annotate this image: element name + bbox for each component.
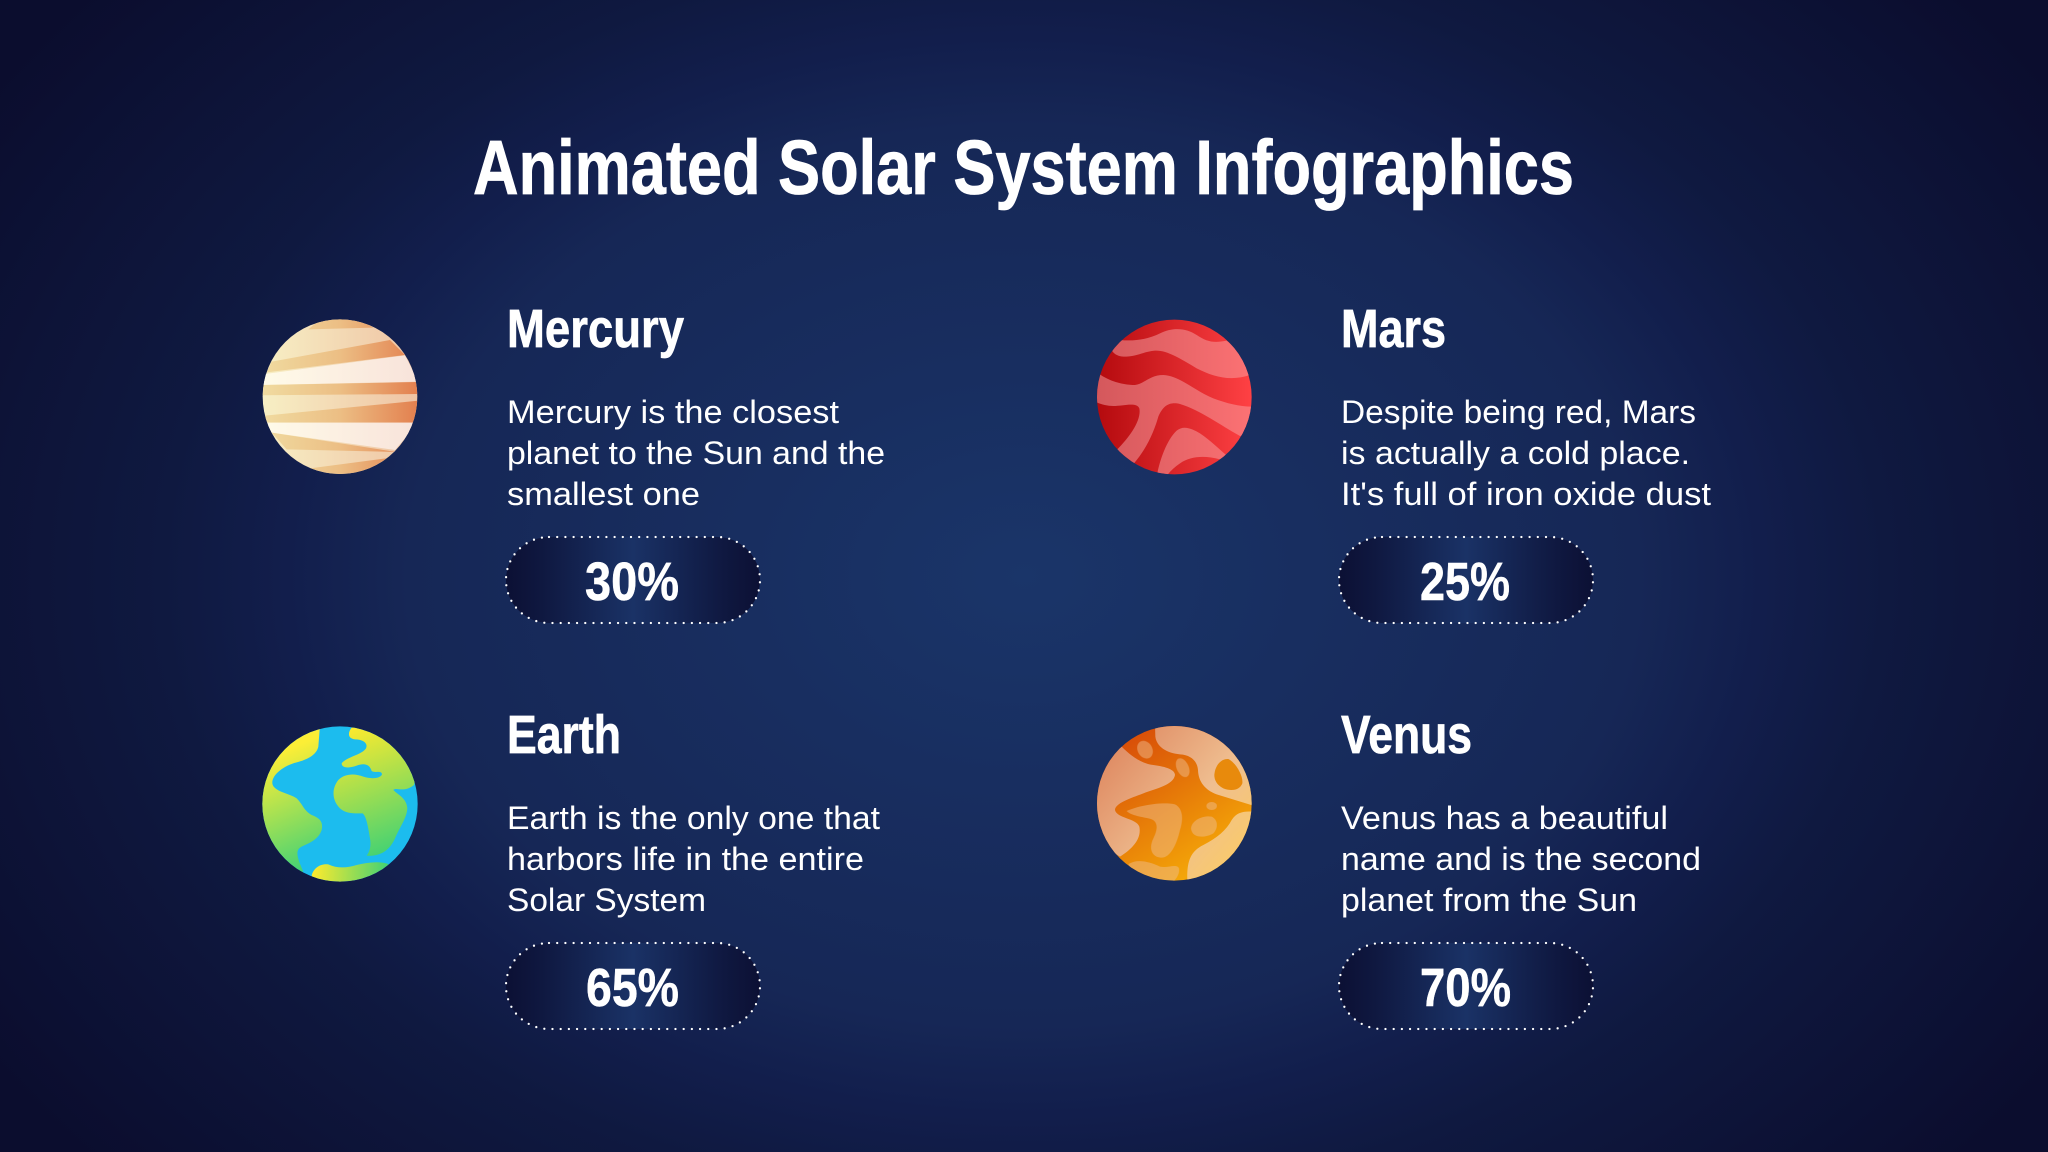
text: Mercury description: smallest one [507,476,700,512]
pill: 70% [1339,943,1593,1029]
text: Venus description: name and is the second [1341,841,1701,877]
pill: 70%: 70% [1420,958,1511,1018]
text: Mars description: Despite being red, Mars [1341,394,1696,430]
icon: Mars planet [1093,317,1257,480]
icon: Venus planet [1097,726,1252,881]
panel: Venus [1090,705,1701,1029]
text: Mars description [1341,394,1711,512]
text: Mars description: It's full of iron oxide dust [1341,476,1711,512]
text: Venus description [1341,800,1701,918]
text: Mercury description: Mercury is the closest [507,394,839,430]
icon: Earth planet [262,726,418,882]
text: Mercury description [507,394,885,512]
text: Venus description: Venus has a beautiful [1341,800,1668,836]
heading: Mercury: Mercury [507,299,684,359]
heading: Earth: Earth [507,705,621,765]
heading: Venus: Venus [1341,705,1472,765]
pill: 25% [1339,537,1593,623]
panel: Mars [1093,299,1711,623]
text: Earth description [507,800,880,918]
title: Animated Solar System Infographics [473,125,1574,211]
pill: 30%: 30% [585,552,679,612]
pill: 30% [506,537,760,623]
panel: Earth [253,705,880,1029]
icon: Mercury planet [260,317,420,480]
text: Mercury description: planet to the Sun and the [507,435,885,471]
text: Earth description: Solar System [507,882,706,918]
pill: 25%: 25% [1420,552,1510,612]
text: Venus description: planet from the Sun [1341,882,1637,918]
text: Mars description: is actually a cold place. [1341,435,1690,471]
text: Earth description: harbors life in the entire [507,841,864,877]
pill: 65% [506,943,760,1029]
text: Earth description: Earth is the only one that [507,800,880,836]
pill: 65%: 65% [586,958,679,1018]
heading: Mars: Mars [1341,299,1446,359]
panel: Mercury [260,299,885,623]
